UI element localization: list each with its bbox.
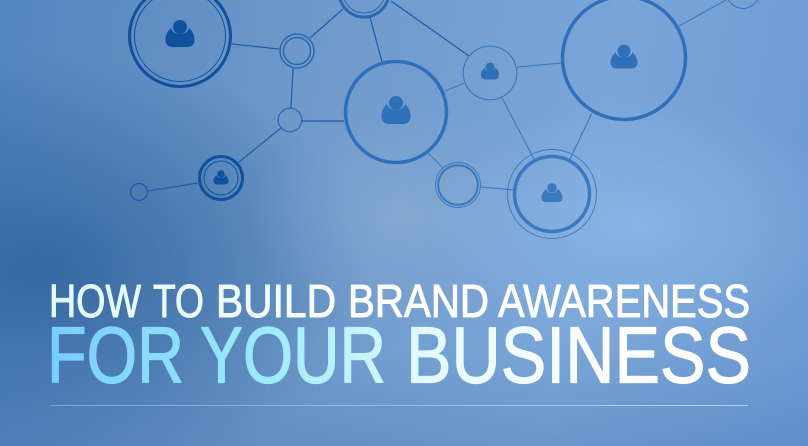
node: user thin ring [463,46,517,100]
connector lines: dark [148,1,469,191]
title line 1: BRAND [348,275,489,327]
node: top center ring [339,0,389,17]
node: large user center [346,62,446,162]
title line 1: BUILD [216,275,336,327]
divider [51,405,748,406]
connector lines: mid [428,0,726,190]
node: top right ring [726,0,760,8]
title line 1: HOW [49,275,141,327]
title line 1 [49,275,750,327]
node: user small dark [200,156,242,200]
node: user lower right [508,150,596,238]
title line 1: AWARENESS [498,275,750,327]
title line 2: FOR [47,310,184,400]
title [47,275,751,400]
node: tiny ring [130,184,148,200]
node: double ring lower center [436,162,480,208]
node: largest user top right [562,0,686,120]
title line 2 [47,310,751,400]
title line 2: BUSINESS [406,310,751,400]
node: small double ring [280,34,314,68]
title line 2: YOUR [200,310,386,400]
node: small ring [278,108,302,132]
node: large user top left [130,0,230,86]
network diagram [130,0,760,238]
title line 1: TO [153,275,204,327]
